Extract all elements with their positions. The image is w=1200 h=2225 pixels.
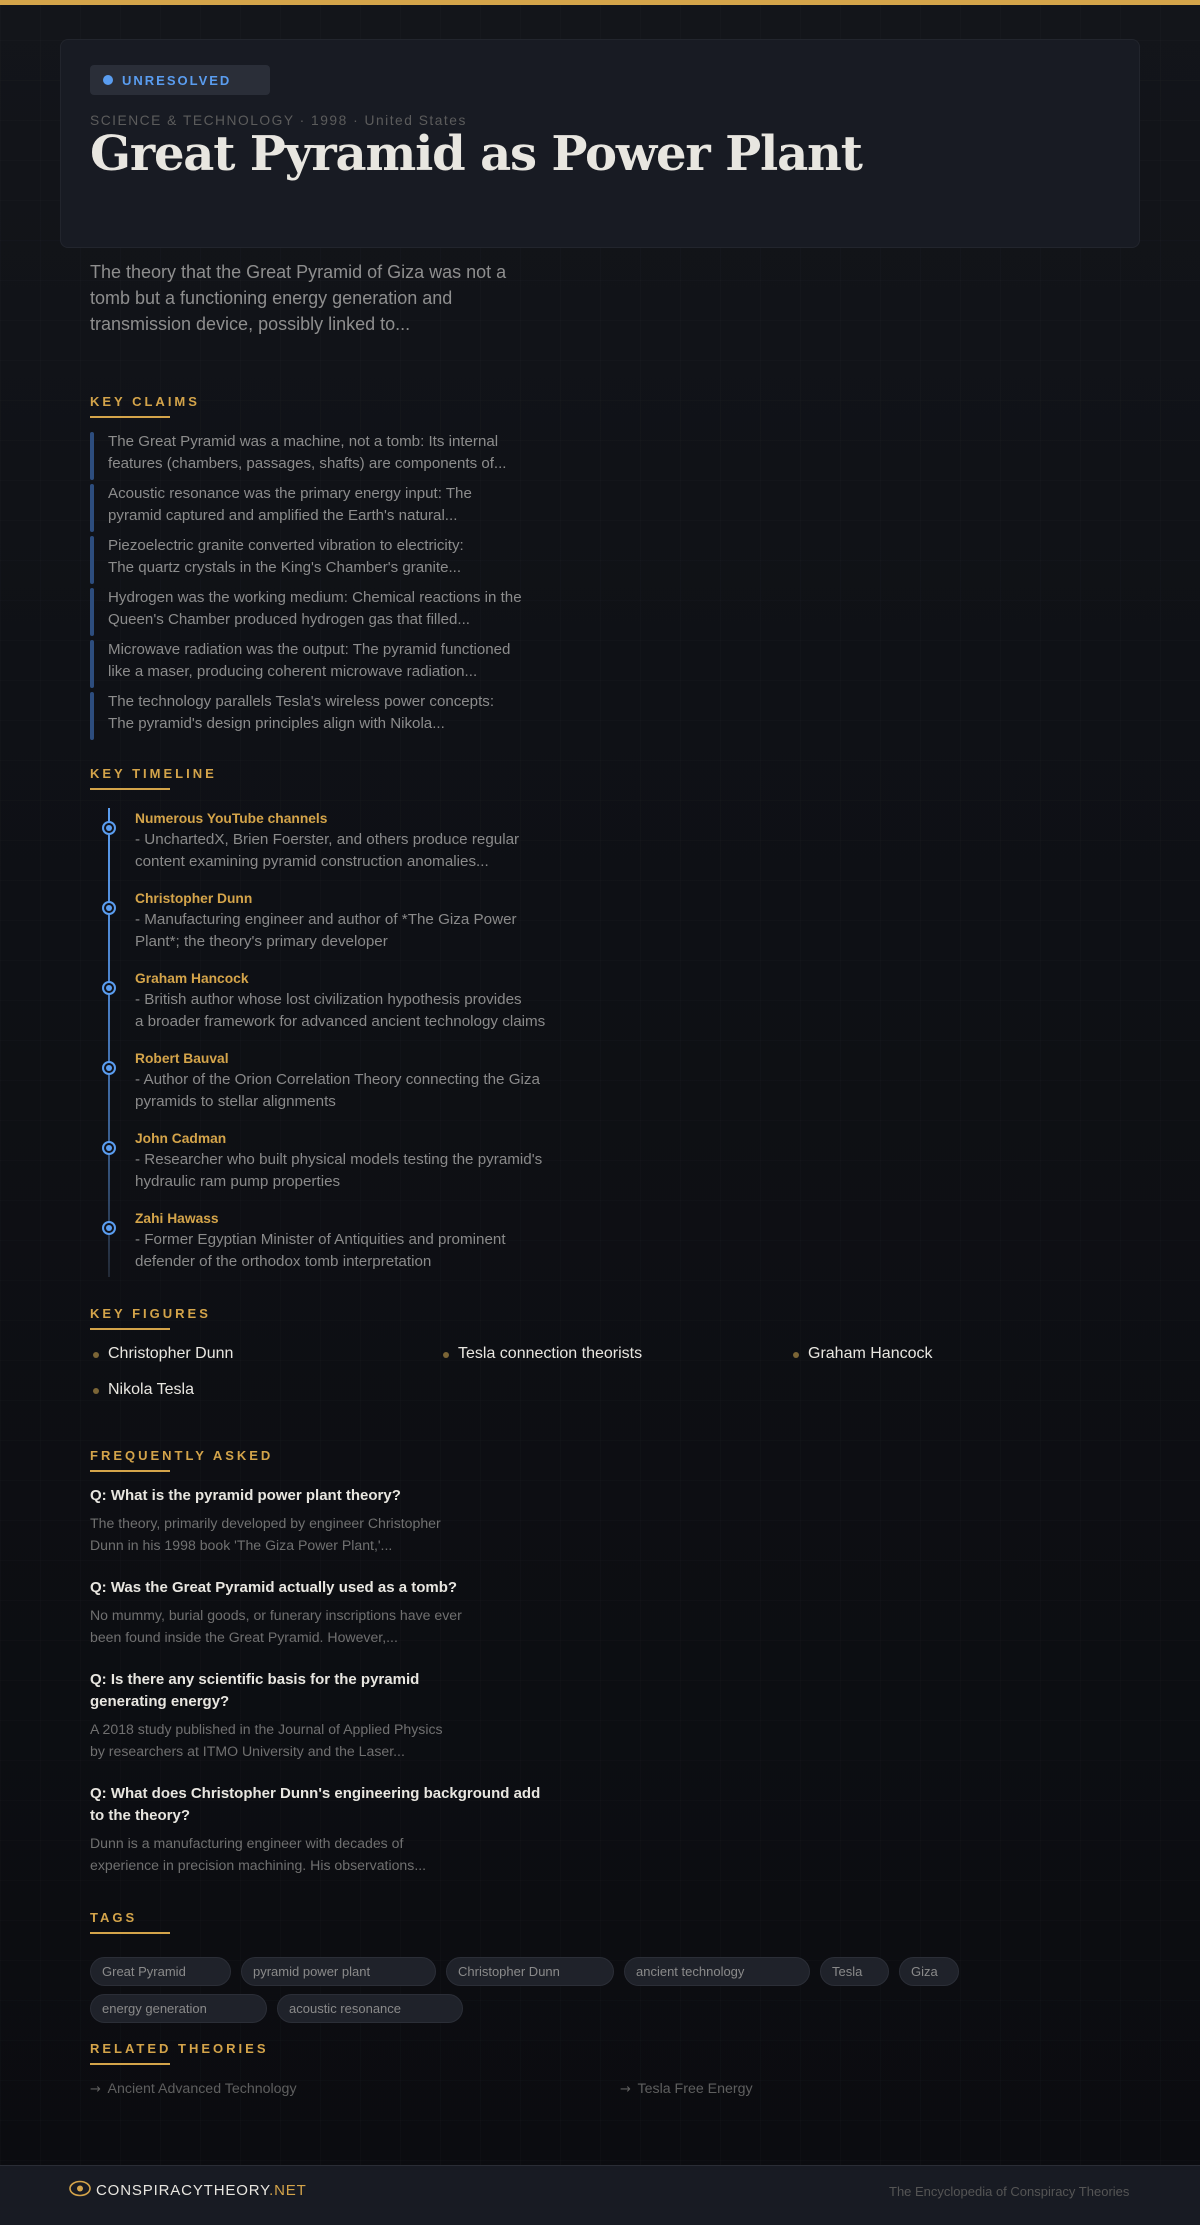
tag: Christopher Dunn: [458, 1964, 560, 1979]
answer 3: [90, 1721, 443, 1759]
event: Graham Hancock: - British author whose lost civilization hypothesis provides: [135, 990, 522, 1008]
question 4: [90, 1785, 540, 1824]
event: Numerous YouTube channels: Numerous YouTube channels: [135, 811, 327, 826]
tag: [899, 1957, 959, 1986]
summary text: tomb but a functioning energy generation and: [90, 288, 452, 308]
panel: key claims list: [90, 432, 522, 740]
footer: [0, 2165, 1200, 2225]
event: Robert Bauval: [102, 1051, 540, 1110]
tag: energy generation: [102, 2001, 207, 2016]
question 1: Q: What is the pyramid power plant theory?: [90, 1487, 401, 1504]
top accent bar: [0, 0, 1200, 5]
claim 3: [90, 536, 464, 584]
summary text: The theory that the Great Pyramid of Giza was not a: [90, 262, 506, 282]
answer 1: The theory, primarily developed by engineer Christopher: [90, 1515, 441, 1531]
question 3: [90, 1671, 419, 1710]
heading: related theories: RELATED THEORIES: [90, 2041, 268, 2056]
panel: hero header: [60, 39, 1140, 248]
answer 1: [90, 1515, 441, 1553]
event: Graham Hancock: a broader framework for advanced ancient technology claims: [135, 1012, 545, 1030]
title: Great Pyramid as Power Plant: [90, 126, 862, 182]
claim 6: The technology parallels Tesla's wireless power concepts:: [108, 693, 494, 710]
answer 3: A 2018 study published in the Journal of Applied Physics: [90, 1721, 443, 1737]
site name: CONSPIRACYTHEORY.NET: [96, 2182, 307, 2199]
heading: key figures: KEY FIGURES: [90, 1306, 211, 1321]
event: Christopher Dunn: - Manufacturing engineer and author of *The Giza Power: [135, 910, 517, 928]
figure: Nikola Tesla: Nikola Tesla: [108, 1380, 194, 1398]
claim 6: The pyramid's design principles align with Nikola...: [108, 715, 445, 732]
event: Zahi Hawass: [102, 1211, 506, 1270]
answer 2: No mummy, burial goods, or funerary inscriptions have ever: [90, 1607, 462, 1623]
badge label: UNRESOLVED: [122, 73, 231, 88]
claim 1: The Great Pyramid was a machine, not a tomb: Its internal: [108, 433, 498, 450]
event: Graham Hancock: [102, 971, 545, 1030]
panel: timeline: [102, 808, 545, 1277]
event: Numerous YouTube channels: content examining pyramid construction anomalies...: [135, 852, 489, 870]
related link: Ancient Advanced Technology: →: [90, 2082, 101, 2097]
question 4: Q: What does Christopher Dunn's engineering background add: [90, 1785, 540, 1802]
claim 1: [90, 432, 507, 480]
question 4: to the theory?: [90, 1807, 190, 1824]
event: Robert Bauval: pyramids to stellar alignments: [135, 1092, 336, 1110]
event: John Cadman: John Cadman: [135, 1131, 226, 1146]
question 3: generating energy?: [90, 1693, 229, 1710]
claim 2: [90, 484, 472, 532]
answer 1: Dunn in his 1998 book 'The Giza Power Plant,'...: [90, 1537, 392, 1553]
related link: Tesla Free Energy: →: [620, 2082, 631, 2097]
tag: acoustic resonance: [289, 2001, 401, 2016]
event: Graham Hancock: Graham Hancock: [135, 971, 248, 986]
event: Christopher Dunn: Plant*; the theory's primary developer: [135, 932, 388, 950]
heading: frequently asked: FREQUENTLY ASKED: [90, 1448, 273, 1463]
related link: Ancient Advanced Technology: Ancient Advanced Technology: [108, 2081, 297, 2097]
event: John Cadman: [102, 1131, 542, 1190]
claim 4: Queen's Chamber produced hydrogen gas that filled...: [108, 611, 470, 628]
tagline: The Encyclopedia of Conspiracy Theories: [889, 2184, 1129, 2199]
figure: Christopher Dunn: Christopher Dunn: [108, 1344, 233, 1362]
answer 2: [90, 1607, 462, 1645]
tag: [90, 1994, 267, 2023]
event: John Cadman: hydraulic ram pump properties: [135, 1172, 340, 1190]
timeline spine: [108, 808, 110, 1277]
heading: tags: TAGS: [90, 1910, 137, 1925]
summary text: transmission device, possibly linked to...: [90, 314, 410, 334]
tag: [241, 1957, 436, 1986]
tag: Giza: [911, 1964, 938, 1979]
icon: eye logo: [69, 2180, 91, 2196]
claim 3: The quartz crystals in the King's Chamber's granite...: [108, 559, 461, 576]
event: Numerous YouTube channels: - UnchartedX, Brien Foerster, and others produce regular: [135, 830, 519, 848]
claim 4: [90, 588, 522, 636]
answer 4: Dunn is a manufacturing engineer with decades of: [90, 1835, 403, 1851]
tag: pyramid power plant: [253, 1964, 370, 1979]
tag: [624, 1957, 810, 1986]
claim 5: Microwave radiation was the output: The pyramid functioned: [108, 641, 510, 658]
tag: [90, 1957, 231, 1986]
figure: Tesla connection theorists: Tesla connection theorists: [458, 1344, 642, 1362]
heading: key timeline: KEY TIMELINE: [90, 766, 217, 781]
related link: Tesla Free Energy: Tesla Free Energy: [638, 2081, 753, 2097]
tag: [446, 1957, 614, 1986]
event: Robert Bauval: Robert Bauval: [135, 1051, 229, 1066]
claim 2: pyramid captured and amplified the Earth's natural...: [108, 507, 457, 524]
event: Zahi Hawass: Zahi Hawass: [135, 1211, 219, 1226]
question 2: Q: Was the Great Pyramid actually used as a tomb?: [90, 1579, 457, 1596]
tag: Great Pyramid: [102, 1964, 186, 1979]
claim 3: Piezoelectric granite converted vibration to electricity:: [108, 537, 464, 554]
event: Christopher Dunn: Christopher Dunn: [135, 891, 252, 906]
event: Robert Bauval: - Author of the Orion Correlation Theory connecting the Giza: [135, 1070, 540, 1088]
summary text: [90, 262, 506, 334]
figure: Graham Hancock: Graham Hancock: [808, 1344, 932, 1362]
claim 4: Hydrogen was the working medium: Chemical reactions in the: [108, 589, 522, 606]
claim 1: features (chambers, passages, shafts) are components of...: [108, 455, 507, 472]
tag: Tesla: [832, 1964, 862, 1979]
claim 6: [90, 692, 494, 740]
panel: key figures list: [93, 1344, 932, 1398]
icon: status dot: [103, 75, 113, 85]
answer 3: by researchers at ITMO University and the Laser...: [90, 1743, 405, 1759]
claim 2: Acoustic resonance was the primary energy input: The: [108, 485, 472, 502]
question 3: Q: Is there any scientific basis for the pyramid: [90, 1671, 419, 1688]
answer 2: been found inside the Great Pyramid. However,...: [90, 1629, 398, 1645]
event: Christopher Dunn: [102, 891, 517, 950]
answer 4: experience in precision machining. His observations...: [90, 1857, 426, 1873]
claim 5: like a maser, producing coherent microwave radiation...: [108, 663, 477, 680]
panel: FAQ: [90, 1487, 540, 1873]
tag: [820, 1957, 889, 1986]
event: Zahi Hawass: - Former Egyptian Minister of Antiquities and prominent: [135, 1230, 506, 1248]
panel: tags: [90, 1957, 959, 2023]
event: Numerous YouTube channels: [102, 811, 519, 870]
category and date line: SCIENCE & TECHNOLOGY · 1998 · United States: [90, 112, 467, 128]
answer 4: [90, 1835, 426, 1873]
heading: key claims: KEY CLAIMS: [90, 394, 200, 409]
tag: [277, 1994, 463, 2023]
event: John Cadman: - Researcher who built physical models testing the pyramid's: [135, 1150, 542, 1168]
tag: ancient technology: [636, 1964, 744, 1979]
status badge: [90, 65, 270, 95]
claim 5: [90, 640, 510, 688]
event: Zahi Hawass: defender of the orthodox tomb interpretation: [135, 1252, 431, 1270]
